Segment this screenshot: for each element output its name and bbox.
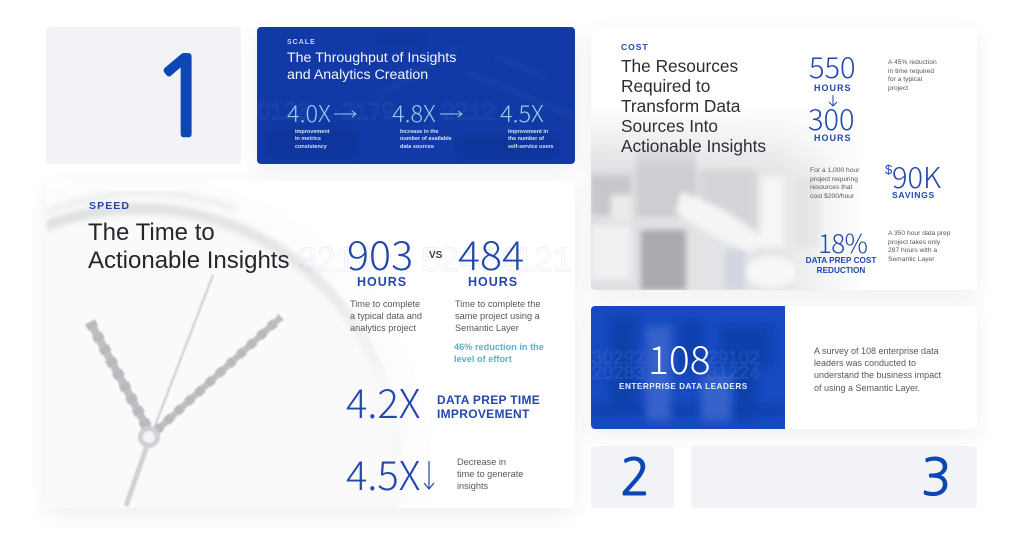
metric: 4.8X: data sources (400, 144, 434, 150)
heading: time to insights: The Time to (88, 219, 215, 246)
panel: cost (591, 27, 977, 290)
callout: 46% reduction: level of effort (454, 354, 512, 364)
metric: 4.0X: in metrics (295, 136, 321, 142)
text: survey description: leaders was conducted to (814, 358, 916, 368)
arrow (334, 110, 357, 118)
metric: 4.0X: 4.0X (287, 95, 331, 129)
panel: number 3 (691, 446, 977, 508)
metric: 550 to 300 hours: HOURS (814, 83, 852, 93)
metric: 484 hours: Semantic Layer (455, 323, 519, 333)
arrow (440, 110, 463, 118)
panel: number 2 (591, 446, 674, 508)
blue photo block: 20283 (592, 363, 645, 384)
metric: 903 hours: analytics project (350, 323, 416, 333)
metric: 550 to 300 hours: 300 (808, 97, 855, 139)
text: 45% reduction: A 45% reduction (888, 59, 937, 66)
metric: 4.5X: Improvement in (508, 129, 548, 135)
callout: 46% reduction (454, 342, 544, 364)
metric: 4.5X down: insights (457, 481, 488, 491)
metric: 484 hours (454, 224, 544, 364)
panel: scale (257, 27, 575, 164)
metric: 108: 108 (648, 330, 711, 386)
metric: 18% cost reduction: 18% (818, 224, 867, 261)
text: 1,000 hour project (810, 167, 860, 200)
metric: 4.5X: self-service users (508, 144, 554, 150)
metric: 4.2X: DATA PREP TIME (437, 393, 540, 407)
heading: throughput: and Analytics Creation (287, 66, 428, 82)
heading: time to insights (88, 219, 289, 274)
text: survey description: A survey of 108 enterprise data (814, 346, 939, 356)
numeral 2: 2 (620, 453, 650, 503)
background: circuit board texture: 2179 (342, 98, 395, 125)
metric: 484 hours: same project using a (455, 311, 540, 321)
metric: 903 hours: 903 (347, 224, 413, 282)
metric: $90K savings: SAVINGS (892, 190, 935, 200)
metric: 550 to 300 hours: 550 (809, 45, 856, 87)
blue photo block: 30292 (592, 348, 645, 369)
metric: $90K savings: 90K (892, 155, 941, 197)
metric: 4.2X: 4.2X (346, 372, 420, 430)
text: 350 hour project: 287 hours with a (888, 247, 937, 254)
vs label: VS (429, 250, 442, 261)
heading: resources (621, 56, 766, 156)
text: 45% reduction: project (888, 85, 908, 92)
text: 350 hour project: A 350 hour data prep (888, 230, 950, 237)
metric: 484 hours: HOURS (468, 275, 518, 289)
label: speed: SPEED (89, 200, 130, 212)
heading: throughput: The Throughput of Insights (287, 50, 456, 66)
background: industrial photo (591, 122, 836, 290)
metric: 4.5X down: time to generate (457, 469, 523, 479)
heading: resources: Required to (621, 76, 710, 96)
metric: 4.0X: consistency (295, 144, 327, 150)
text: 350 hour project: project takes only (888, 239, 940, 246)
text: 1,000 hour project: project requiring (810, 176, 858, 183)
panel: number 1 (46, 27, 241, 164)
text: 350 hour project (888, 230, 950, 263)
panel: speed (46, 181, 575, 508)
metric: 4.8X: Increase in the (400, 129, 439, 135)
metric: 4.5X down: Decrease in (457, 457, 506, 467)
label: enterprise data leaders: ENTERPRISE DATA LEADERS (619, 382, 748, 391)
metric: 550 to 300 hours (808, 45, 856, 143)
heading: resources: The Resources (621, 56, 738, 76)
label: scale: SCALE (287, 39, 316, 46)
text: survey description: of using a Semantic Layer. (814, 383, 920, 393)
numeral 3: 3 (921, 453, 951, 503)
background: clock photo (46, 190, 572, 508)
metric: 4.8X: number of available (400, 136, 452, 142)
metric: 484 hours: 484 (458, 224, 524, 282)
metric: 18% cost reduction: DATA PREP COST REDUCTION (806, 256, 876, 275)
text: survey description (814, 346, 942, 393)
numeral 1: 1 (150, 43, 215, 151)
text: 1,000 hour project: cost $200/hour (810, 193, 854, 200)
arrow: down (424, 461, 434, 490)
blue photo block: 31224 (707, 363, 760, 384)
text: 45% reduction (888, 59, 937, 92)
label: cost: COST (621, 42, 649, 52)
blue photo block (591, 306, 785, 429)
text: 45% reduction: for a typical (888, 76, 922, 83)
metric: 4.5X down: 4.5X (346, 444, 420, 502)
metric: 4.0X (287, 95, 357, 150)
text: 1,000 hour project: resources that (810, 184, 852, 191)
text: 45% reduction: in time required (888, 68, 934, 75)
metric: 4.8X (392, 95, 463, 150)
background: clock photo: 5248 (421, 241, 497, 279)
metric: 4.5X: the number of (508, 136, 544, 142)
metric: 903 hours (347, 224, 422, 333)
heading: time to insights: Actionable Insights (88, 247, 289, 274)
panel: survey (591, 306, 977, 429)
metric: 4.2X (346, 372, 540, 430)
metric: 4.8X: 4.8X (392, 95, 436, 129)
background: circuit board texture: 2212 (442, 98, 495, 125)
heading: resources: Sources Into (621, 116, 718, 136)
callout: 46% reduction: 46% reduction in the (454, 342, 544, 352)
heading: throughput (287, 50, 456, 82)
metric: 4.5X down (346, 444, 523, 502)
heading: resources: Transform Data (621, 96, 740, 116)
heading: resources: Actionable Insights (621, 136, 766, 156)
metric: 903 hours: Time to complete (350, 299, 420, 309)
metric: 18% cost reduction (806, 224, 876, 275)
metric: 4.0X: improvement (295, 129, 330, 135)
metric: 550 to 300 hours: HOURS (814, 133, 852, 143)
metric: 4.2X: IMPROVEMENT (437, 407, 530, 421)
blue photo block: 29102 (707, 348, 760, 369)
background: clock photo: 3210 (298, 241, 374, 279)
metric: $90K savings: $ (885, 162, 892, 177)
metric: 903 hours: HOURS (357, 275, 407, 289)
metric: 484 hours: Time to complete the (455, 299, 540, 309)
metric: 4.5X: 4.5X (500, 95, 544, 129)
background: clock photo: 4121 (496, 241, 572, 279)
metric: 4.5X (500, 95, 554, 150)
text: 1,000 hour project: For a 1,000 hour (810, 167, 859, 174)
metric: 903 hours: a typical data and (350, 311, 422, 321)
text: survey description: understand the business impact (814, 370, 941, 380)
background: circuit board texture (257, 38, 554, 155)
text: 350 hour project: Semantic Layer (888, 256, 934, 263)
arrow: down (828, 95, 838, 107)
background: circuit board texture: 0123 (257, 98, 310, 125)
